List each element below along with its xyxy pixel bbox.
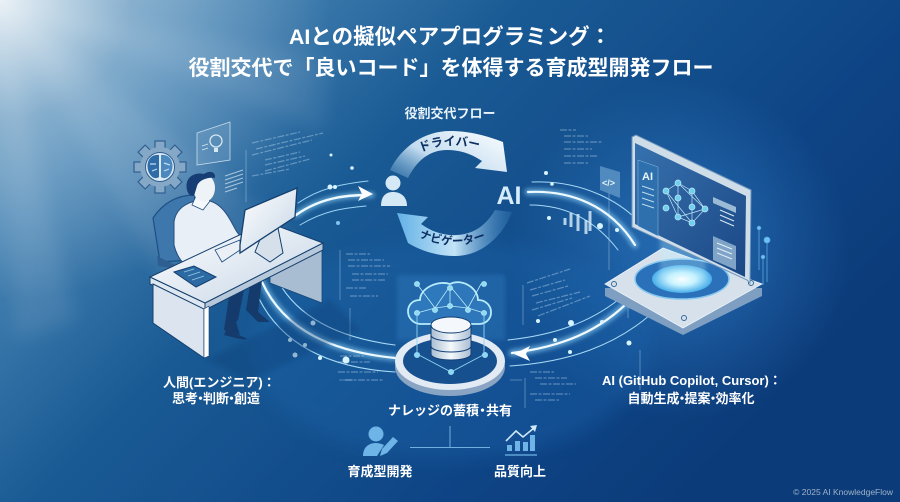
icon: user — [381, 176, 407, 206]
code snippets background — [252, 130, 602, 400]
title — [188, 24, 714, 80]
chair — [153, 195, 195, 270]
label: human engineer: 思考・判断・創造 — [172, 391, 260, 406]
outcome: quality improvement — [494, 425, 546, 479]
desk top — [150, 222, 323, 358]
title: 役割交代で「良いコード」を体得する育成型開発フロー — [188, 56, 714, 80]
arc: human to knowledge — [255, 275, 395, 372]
code tag: </> — [602, 178, 615, 188]
cloud — [408, 282, 491, 324]
label: knowledge: ナレッジの蓄積・共有 — [388, 403, 512, 418]
icon: person with pencil — [363, 426, 398, 456]
person — [174, 172, 240, 275]
title: AIとの擬似ペアプログラミング： — [289, 24, 611, 49]
arrow: driver — [390, 131, 507, 178]
illustration: knowledge hub — [395, 275, 505, 396]
label: AI tools: 自動生成・提案・効率化 — [627, 391, 755, 406]
legs — [224, 280, 270, 340]
panel: text lines — [225, 170, 243, 192]
label: AI tools: AI (GitHub Copilot, Cursor)： — [602, 373, 782, 388]
flow arcs — [255, 181, 650, 372]
ring base — [395, 332, 505, 396]
label: human engineer — [163, 375, 276, 406]
heading: role swap flow: 役割交代フロー — [404, 106, 496, 121]
screen — [632, 135, 751, 283]
right desk leg — [270, 246, 322, 303]
label: AI: AI — [496, 182, 522, 210]
arrow: navigator: ナビゲーター — [421, 230, 484, 246]
code tag — [600, 166, 620, 198]
role swap cycle — [381, 106, 522, 256]
monitor — [240, 188, 297, 262]
neural network — [663, 180, 708, 226]
illustration: AI monitor on platform — [565, 135, 770, 335]
sparkle dots — [288, 154, 632, 364]
label: AI tools — [602, 373, 782, 406]
hologram beam — [660, 225, 708, 278]
illustration: engineer at desk — [134, 122, 360, 380]
sidebar: AI — [638, 160, 658, 236]
beacon pins — [757, 226, 770, 285]
outcome: growth development: 育成型開発 — [347, 464, 413, 479]
outcome: quality improvement: 品質向上 — [494, 464, 546, 479]
arc: human to flow — [296, 181, 373, 225]
arc: AI to knowledge — [508, 298, 650, 366]
network base — [414, 313, 488, 375]
label: human engineer: 人間(エンジニア)： — [163, 375, 276, 390]
desk shadow — [205, 300, 360, 380]
connector — [410, 426, 490, 448]
outcome: growth development — [347, 426, 413, 479]
arc: AI to flow — [528, 182, 650, 250]
keyboard and tablet — [174, 240, 240, 287]
database cylinder — [431, 317, 471, 360]
bars — [565, 211, 590, 234]
glow panel — [397, 275, 505, 340]
icon: brain gear — [134, 141, 186, 193]
platform — [605, 248, 762, 335]
copyright: © 2025 AI KnowledgeFlow — [793, 487, 894, 497]
icon: bar chart growth — [505, 425, 537, 455]
arrow: driver: ドライバー — [420, 135, 480, 152]
arrow: navigator — [397, 210, 512, 256]
icon: lightbulb panel — [197, 122, 230, 165]
sidebar: AI: AI — [642, 171, 653, 183]
side cards — [713, 197, 736, 213]
